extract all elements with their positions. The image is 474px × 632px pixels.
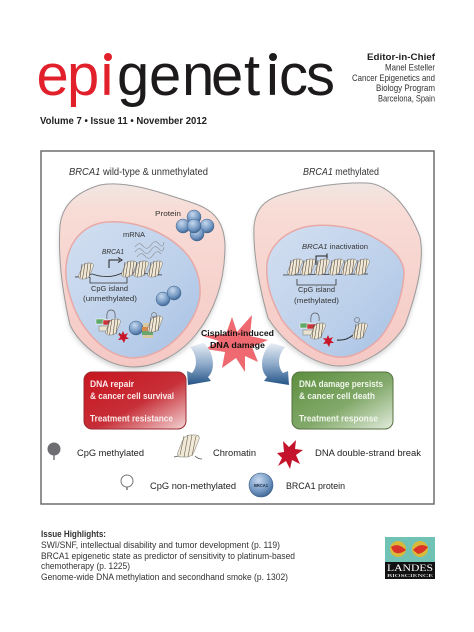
protein cluster [176, 210, 214, 241]
icon: break star [277, 440, 303, 469]
blocked promoter arrow [316, 254, 327, 265]
text: repair: Treatment resistance [90, 414, 173, 424]
repair complex [96, 310, 124, 337]
issue highlights [41, 529, 295, 583]
icon: chromatin [174, 435, 202, 459]
damage complex [300, 313, 327, 339]
heading: wild-type: BRCA1 wild-type & unmethylated [69, 167, 208, 178]
text: repair: DNA repair [90, 379, 134, 389]
panel: right cell [254, 183, 421, 369]
logo: Landes Bioscience [385, 537, 435, 579]
repair stack [142, 312, 164, 338]
arrow: transcription start [109, 258, 122, 268]
label: BRCA1 inactivation: BRCA1 inactivation [302, 242, 368, 251]
legend [48, 435, 422, 497]
label: CpG non-methylated: CpG non-methylated [150, 481, 236, 491]
label: CpG methylated: CpG methylated [77, 448, 144, 458]
label: mRNA: mRNA [123, 230, 145, 239]
label: cisplatin damage [201, 328, 274, 350]
bracket: CpG island [297, 279, 336, 285]
panel: figure frame [41, 151, 434, 504]
icon: damage star [203, 315, 268, 372]
label: cisplatin damage: DNA damage [210, 340, 265, 350]
editor block [352, 52, 436, 104]
broken strand [337, 318, 369, 340]
text: response [299, 379, 383, 424]
icon: BRCA1 protein [249, 473, 273, 497]
label: CpG island: CpG island [298, 285, 335, 294]
nucleus: right [267, 225, 404, 357]
issue line: Volume 7 • Issue 11 • November 2012 [40, 116, 207, 127]
BRCA1 at repair site [129, 321, 143, 335]
label: methylated: (methylated) [294, 296, 340, 305]
text: response: & cancer cell death [299, 391, 375, 401]
label: BRCA1 protein: BRCA1 protein [286, 481, 345, 491]
logo: Landes Bioscience: LANDES [387, 563, 433, 573]
damage star [323, 335, 334, 347]
editor block: Biology Program [376, 83, 435, 94]
issue highlights: BRCA1 epigenetic state as predictor of sensitivity to platinum-based [41, 551, 295, 562]
arrow: left curved [187, 343, 213, 385]
icon: CpG non-methylated [121, 475, 133, 490]
label: unmethylated: (unmethylated) [83, 294, 138, 303]
issue highlights: Genome-wide DNA methylation and secondhand smoke (p. 1302) [41, 572, 288, 583]
damage star [118, 331, 129, 343]
box: resistance [84, 372, 186, 429]
issue highlights: SWI/SNF, intellectual disability and tumor development (p. 119) [41, 540, 280, 551]
editor block: Barcelona, Spain [378, 94, 435, 104]
label: cisplatin damage: Cisplatin-induced [201, 328, 274, 338]
icon: CpG methylated [48, 442, 60, 460]
issue highlights: Issue Highlights: [41, 529, 106, 540]
editor block: Cancer Epigenetics and [352, 73, 435, 84]
nucleus: left [66, 222, 200, 358]
chromatin fibre [75, 261, 164, 279]
text: response: DNA damage persists [299, 379, 383, 389]
mRNA waves [135, 242, 164, 258]
label: CpG island: CpG island [91, 284, 128, 293]
arrow: right curved [262, 343, 289, 385]
icon: BRCA1 protein: BRCA1 [254, 483, 268, 488]
text: repair: & cancer cell survival [90, 391, 174, 401]
title: genetics [117, 43, 335, 108]
issue highlights: chemotherapy (p. 1225) [41, 561, 130, 572]
title: epi [36, 43, 113, 108]
label: break: DNA double-strand break [315, 448, 422, 458]
editor block: Editor-in-Chief [367, 52, 436, 63]
text: repair [90, 379, 174, 424]
panel: left cell [59, 184, 225, 370]
label: protein: Protein [155, 209, 181, 218]
text: response: Treatment response [299, 414, 378, 424]
chromatin fibre [283, 259, 371, 275]
nuclear BRCA1 proteins [156, 286, 181, 306]
logo: Landes Bioscience: BIOSCIENCE [387, 573, 434, 578]
heading: methylated: BRCA1 methylated [303, 167, 379, 178]
bracket: CpG island [90, 277, 127, 283]
label: BRCA1 gene: BRCA1 [102, 247, 124, 256]
editor block: Manel Esteller [385, 62, 435, 74]
label: chromatin: Chromatin [213, 448, 256, 458]
box: response [292, 372, 393, 429]
